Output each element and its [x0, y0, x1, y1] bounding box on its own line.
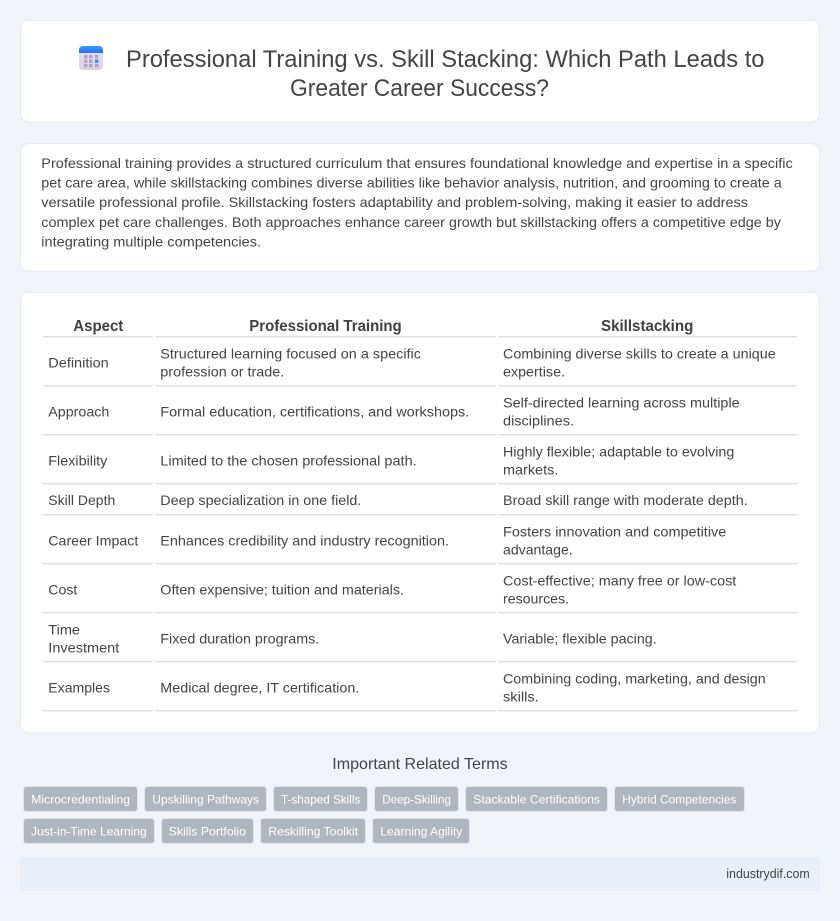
- intro paragraph: complex pet care challenges. Both approaches enhance career growth but skillstacking offers a competitive edge by: [41, 214, 781, 230]
- row: definition: expertise.: [503, 364, 565, 380]
- panel: title header: [20, 20, 820, 122]
- row: cost: [48, 572, 736, 606]
- row: cost: Often expensive; tuition and materials.: [160, 582, 404, 598]
- row: career impact: Fosters innovation and competitive: [503, 524, 727, 540]
- tag: Microcredentialing: [24, 786, 138, 812]
- row: time investment: Investment: [48, 640, 119, 656]
- row: skill depth: Skill Depth: [48, 492, 115, 508]
- panel: comparison table: [20, 292, 820, 733]
- row: time investment: Variable; flexible pacing.: [503, 630, 657, 646]
- row: time investment: [48, 622, 657, 656]
- row: approach: Approach: [48, 404, 109, 420]
- title: Greater Career Success?: [290, 75, 549, 102]
- row: skill depth: [48, 492, 748, 508]
- row: career impact: advantage.: [503, 542, 573, 558]
- row: flexibility: markets.: [503, 462, 558, 478]
- row: approach: [48, 394, 740, 428]
- row: definition: [48, 346, 776, 380]
- row: flexibility: Limited to the chosen professional path.: [160, 452, 417, 468]
- row: cost: Cost: [48, 582, 77, 598]
- related terms tags: [24, 786, 744, 844]
- icon: calendar: [79, 46, 103, 70]
- row: career impact: Enhances credibility and industry recognition.: [160, 532, 449, 548]
- table header row: Aspect: [73, 318, 124, 335]
- panel: introduction: [20, 144, 820, 271]
- row: career impact: [48, 524, 727, 558]
- intro paragraph: [41, 155, 793, 249]
- tag: T-shaped Skills: [274, 786, 368, 812]
- row: flexibility: [48, 444, 734, 478]
- row: examples: skills.: [503, 688, 539, 704]
- tag: Learning Agility: [372, 818, 470, 844]
- heading: important related terms: Important Related Terms: [332, 756, 508, 773]
- intro paragraph: integrating multiple competencies.: [41, 233, 261, 249]
- tag: Learning Agility: Learning Agility: [380, 824, 462, 838]
- row: definition: Combining diverse skills to create a unique: [503, 346, 776, 362]
- tag: Just-in-Time Learning: [24, 818, 154, 844]
- row: cost: Cost-effective; many free or low-cost: [503, 572, 736, 588]
- table header row: [73, 318, 693, 335]
- tag: Upskilling Pathways: Upskilling Pathways: [152, 792, 259, 806]
- row: examples: Examples: [48, 680, 110, 696]
- row: examples: Medical degree, IT certification.: [160, 680, 359, 696]
- tag: Reskilling Toolkit: Reskilling Toolkit: [268, 824, 359, 838]
- footer bar: [20, 857, 820, 891]
- tag: Reskilling Toolkit: [260, 818, 366, 844]
- row: skill depth: Deep specialization in one field.: [160, 492, 361, 508]
- row: definition: profession or trade.: [160, 364, 284, 380]
- intro paragraph: Professional training provides a structured curriculum that ensures foundational knowledge and expertise in a specific: [41, 155, 793, 171]
- tag: Upskilling Pathways: [144, 786, 266, 812]
- intro paragraph: pet care area, while skillstacking combines diverse abilities like behavior analysis, nutrition, and grooming to create a: [41, 175, 782, 191]
- row: skill depth: Broad skill range with moderate depth.: [503, 492, 748, 508]
- tag: Just-in-Time Learning: Just-in-Time Learning: [31, 824, 147, 838]
- tag: Deep-Skilling: [374, 786, 458, 812]
- tag: T-shaped Skills: T-shaped Skills: [281, 792, 360, 806]
- tag: Microcredentialing: Microcredentialing: [31, 792, 130, 806]
- row: examples: [48, 670, 766, 704]
- row: time investment: Time: [48, 622, 80, 638]
- title: [126, 46, 764, 102]
- tag: Skills Portfolio: [162, 818, 254, 844]
- tag: Hybrid Competencies: [614, 786, 744, 812]
- row: approach: Self-directed learning across multiple: [503, 394, 740, 410]
- tag: Stackable Certifications: [466, 786, 608, 812]
- tag: Skills Portfolio: Skills Portfolio: [169, 824, 246, 838]
- row: approach: disciplines.: [503, 412, 574, 428]
- tag: Hybrid Competencies: Hybrid Competencies: [622, 792, 736, 806]
- footer source text: industrydif.com: [726, 866, 810, 881]
- row: examples: Combining coding, marketing, and design: [503, 670, 766, 686]
- intro paragraph: versatile professional profile. Skillstacking fosters adaptability and problem-solving, making it easier to address: [41, 194, 748, 210]
- row: flexibility: Highly flexible; adaptable to evolving: [503, 444, 734, 460]
- tag: Deep-Skilling: Deep-Skilling: [382, 792, 451, 806]
- row: time investment: Fixed duration programs.: [160, 630, 319, 646]
- row: approach: Formal education, certifications, and workshops.: [160, 404, 469, 420]
- row: cost: resources.: [503, 590, 569, 606]
- row: definition: Definition: [48, 354, 109, 370]
- row: career impact: Career Impact: [48, 532, 138, 548]
- table header row: Skillstacking: [601, 318, 693, 335]
- title: Professional Training vs. Skill Stacking: Which Path Leads to: [126, 46, 764, 73]
- row: flexibility: Flexibility: [48, 452, 107, 468]
- row: definition: Structured learning focused on a specific: [160, 346, 421, 362]
- tag: Stackable Certifications: Stackable Certifications: [473, 792, 600, 806]
- table header row: Professional Training: [249, 318, 402, 335]
